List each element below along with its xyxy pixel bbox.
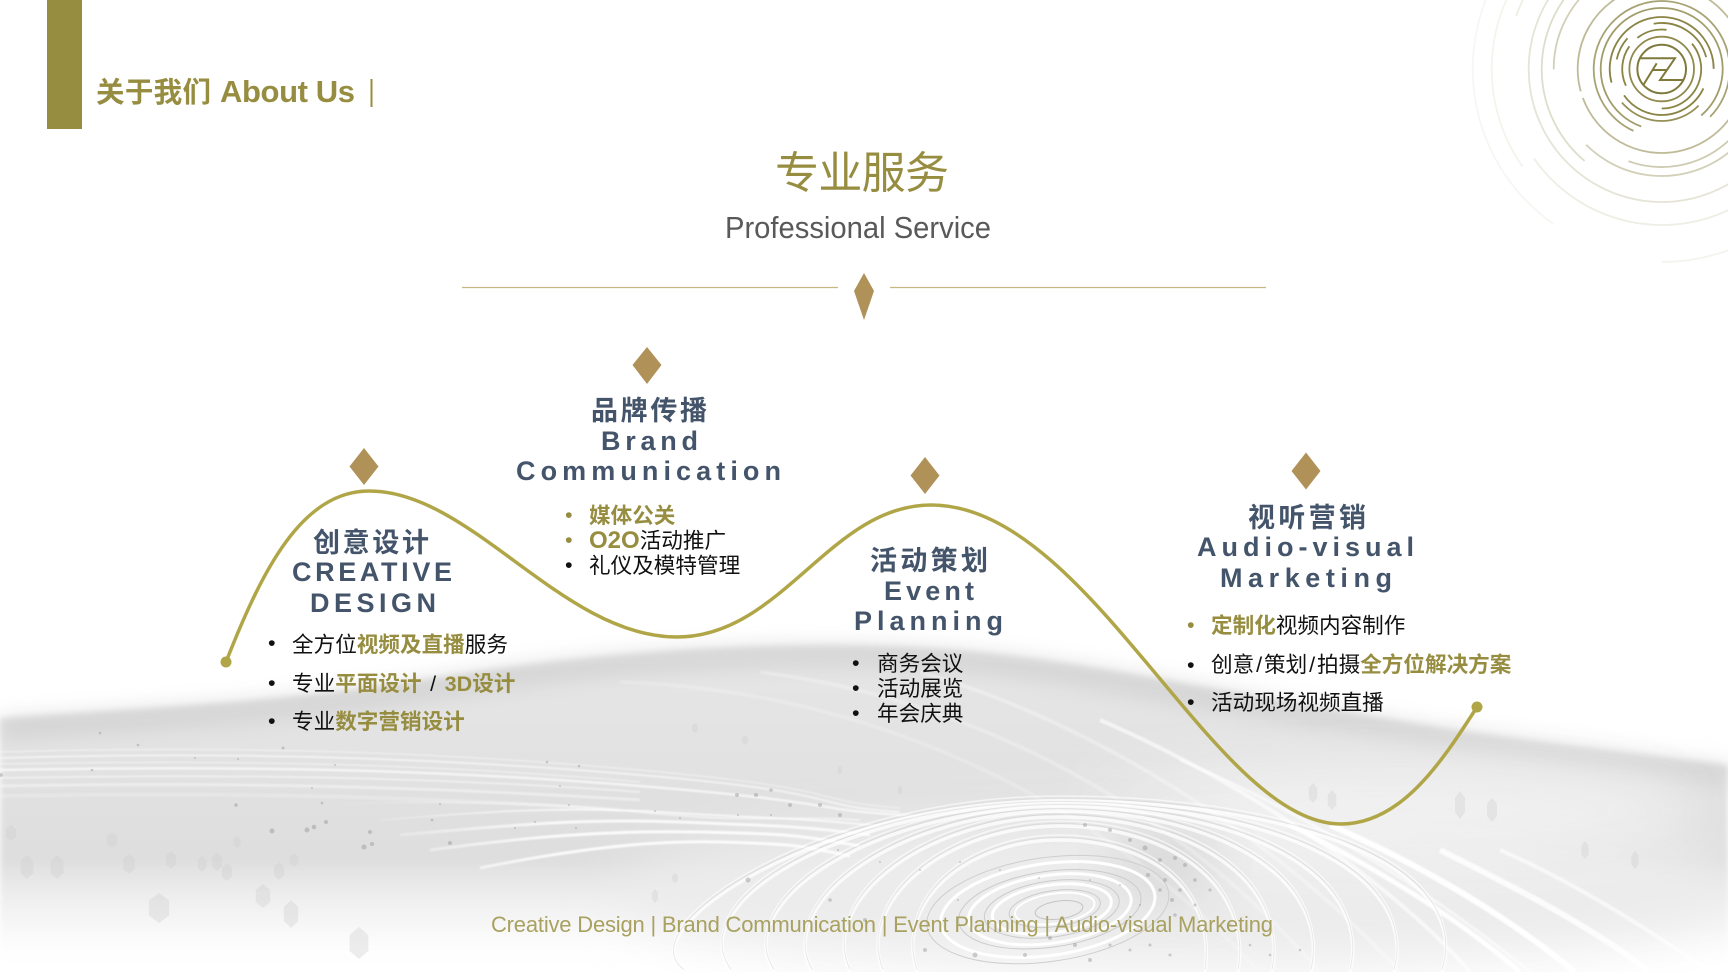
panel: creative design [268,448,515,734]
heading [854,546,1003,636]
heading: 视听营销 [1248,503,1366,533]
heading: Marketing [1220,563,1392,593]
icon: diamond [350,448,378,485]
bullet list: • [268,708,276,733]
heading: 创意设计 [313,528,429,558]
bullet list: • [565,552,573,577]
heading [292,528,452,618]
bullet list: 年会庆典 [877,701,963,726]
bullet list: 商务会议 [877,651,964,676]
bullet list [268,630,515,734]
decorative logo rings [1390,0,1728,341]
bullet list: 媒体公关 [589,503,676,528]
bullet list: 专业平面设计 / 3D设计 [292,671,515,696]
bullet list: • [565,502,573,527]
wave curve [220,491,1482,824]
section label: About Us [220,74,355,109]
bullet list: • [1187,652,1195,677]
heading [1197,503,1414,593]
dust particles [0,732,1301,962]
subtitle: Professional Service [725,210,991,245]
heading: Audio-visual [1197,532,1414,562]
bullet list: 礼仪及模特管理 [589,553,740,578]
heading [516,396,781,486]
bullet list [852,650,964,726]
bullet list: • [268,670,276,695]
footer tagline: Creative Design | Brand Communication | Event Planning | Audio-visual Marketing [491,912,1273,937]
title divider [462,273,1266,320]
background: silver wave [0,645,1728,972]
heading: 活动策划 [870,546,988,576]
section label: 关于我们 [96,77,211,109]
bullet list: • [268,630,276,655]
icon: diamond [1292,452,1320,490]
bullet list: • [852,675,860,700]
panel: event planning [852,457,1003,726]
icon: logo mark [1637,45,1686,93]
bullet list: • [1187,689,1195,714]
bullet list: 活动现场视频直播 [1211,690,1384,715]
heading: CREATIVE [292,557,452,587]
bullet list: • [1187,612,1195,637]
bullet list: • [852,700,860,725]
bullet list: 定制化视频内容制作 [1211,613,1405,638]
flow lines [0,672,1710,972]
bullet list: 专业数字营销设计 [292,709,465,734]
heading: Brand [601,426,698,456]
icon: diamond [910,457,940,494]
header bar [47,0,82,129]
heading: Event [884,576,974,606]
bullet list: 活动展览 [877,676,963,701]
swirl rings [673,796,1446,972]
bullet list: • [565,527,573,552]
heading: 品牌传播 [591,396,707,426]
heading: Planning [854,606,1003,636]
heading: DESIGN [310,588,436,618]
bullet list: 全方位视频及直播服务 [292,632,508,657]
panel: brand communication [516,347,781,578]
hexagon particles [6,723,1639,959]
title: 专业服务 [775,149,949,198]
bullet list: • [852,650,860,675]
bullet list [565,502,740,578]
bullet list: O2O活动推广 [589,527,726,554]
bullet list [1187,612,1512,715]
icon: diamond [632,347,662,384]
section label [96,74,372,109]
heading: Communication [516,456,781,486]
icon: kite ornament [854,273,874,320]
bullet list: 创意/策划/拍摄全方位解决方案 [1211,652,1512,677]
panel: audio-visual marketing [1187,452,1512,715]
